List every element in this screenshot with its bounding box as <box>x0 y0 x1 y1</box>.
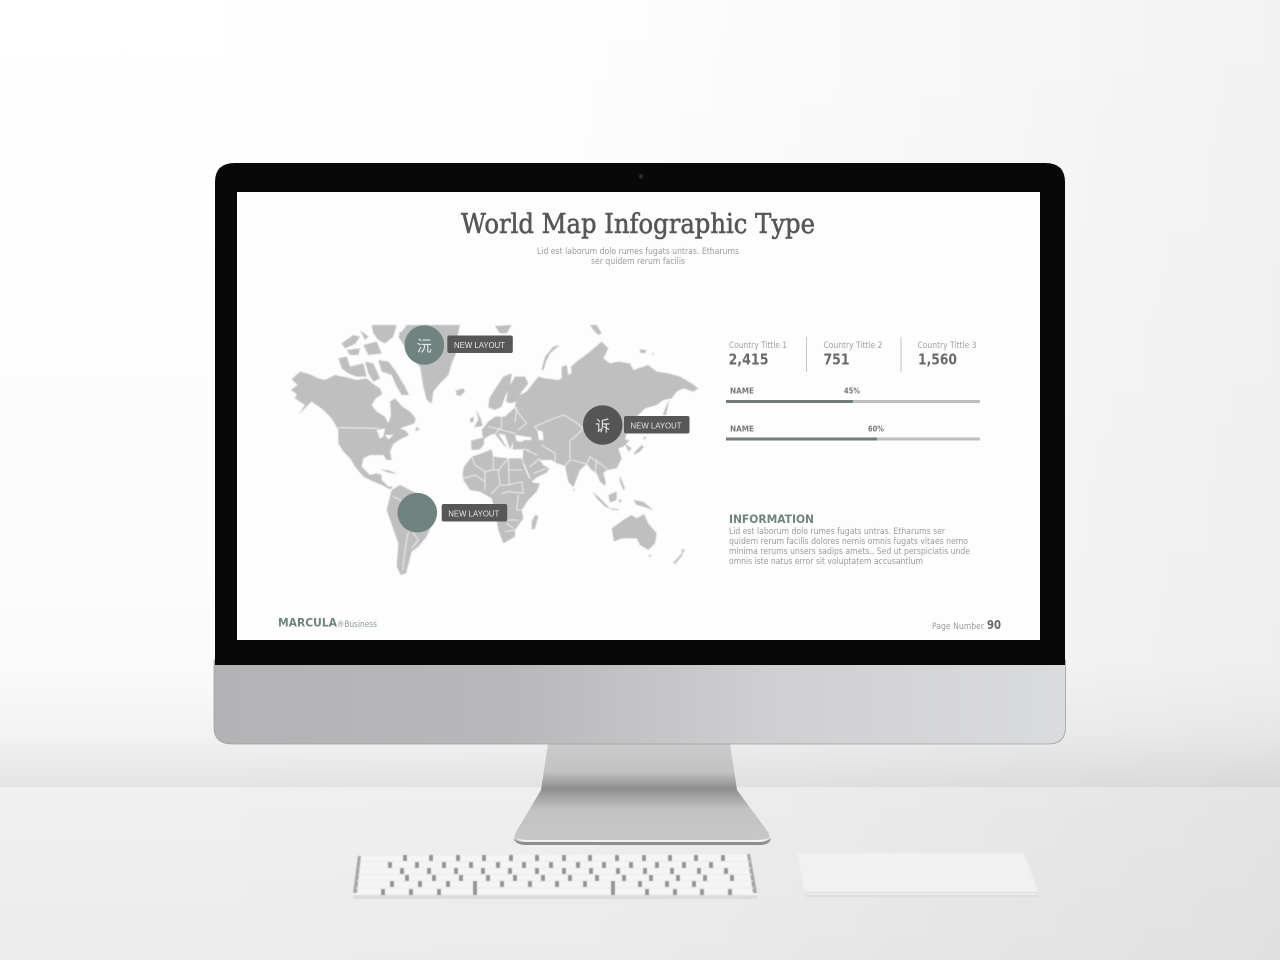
marker: China <box>583 405 690 445</box>
Africa <box>463 449 540 543</box>
Scandinavia <box>488 373 528 410</box>
stat: country 2: Country Tittle 2 <box>824 341 882 351</box>
Greenland <box>398 325 460 403</box>
marker: South America <box>398 493 507 532</box>
key gaps <box>381 855 734 895</box>
British Isles and Iberia <box>470 409 484 450</box>
progress bar: 45% <box>726 386 980 403</box>
footer brand: MARCULA <box>278 616 337 630</box>
world map <box>291 325 698 575</box>
information body <box>729 527 970 567</box>
Iceland <box>456 388 465 396</box>
marker: Greenland <box>404 325 513 365</box>
stat: country 3: Country Tittle 3 <box>918 341 976 351</box>
Madagascar <box>532 515 538 530</box>
marker circle <box>398 493 437 532</box>
keyboard body <box>353 854 757 899</box>
marker label <box>442 504 507 522</box>
progress bar: 45%: 45% <box>844 386 860 396</box>
Arctic islands <box>338 325 420 431</box>
information body: minima rerums unsers sadips amets.. Sed ut perspiciatis unde <box>729 547 970 557</box>
North Africa coast <box>472 441 483 447</box>
subtitle <box>537 247 740 267</box>
screen <box>237 192 1040 640</box>
Arabia <box>523 449 549 482</box>
information body: omnis iste natus error sit voluptatem accusantium <box>729 557 923 567</box>
stat: country 2: 751 <box>824 350 850 368</box>
Russia and Europe mainland <box>482 342 698 460</box>
stat: country 1 <box>728 341 787 368</box>
Great Lakes <box>377 428 393 439</box>
monitor chin <box>214 660 1066 744</box>
progress bar: 45%: NAME <box>730 386 754 396</box>
monitor bezel <box>215 163 1065 665</box>
stat: country 2 <box>824 341 882 368</box>
stat: country 3 <box>918 341 976 368</box>
progress bar: 60% <box>726 424 980 440</box>
footer brand: ®Business <box>337 620 377 630</box>
information body: quidem rerum facilis dolores nemis omnis fugats vitaes nemo <box>729 537 968 547</box>
information body: Lid est laborum dolo rumes fugats untras. Etharums ser <box>729 527 945 537</box>
monitor stand <box>513 744 771 845</box>
Europe and northern Asia <box>470 325 698 460</box>
marker circle <box>404 325 444 365</box>
background: desk <box>0 787 1280 960</box>
Australia <box>612 514 657 557</box>
North America and Greenland <box>291 325 465 460</box>
New Zealand <box>573 488 685 564</box>
footer brand <box>278 616 377 630</box>
camera <box>639 174 643 179</box>
information heading: INFORMATION <box>729 512 814 526</box>
marker label <box>447 336 513 353</box>
Africa and southern Asia <box>463 440 685 564</box>
monitor <box>214 163 1066 744</box>
Canada and USA <box>291 372 416 460</box>
Indonesia and Philippines <box>593 475 653 510</box>
borders <box>488 407 583 447</box>
subtitle: ser quidem rerum facilis <box>591 257 686 267</box>
marker label <box>624 416 690 434</box>
trackpad <box>797 853 1038 897</box>
marker circle <box>583 405 622 445</box>
Black Sea and Caspian Sea <box>515 430 544 444</box>
stat: country 1: 2,415 <box>728 350 768 368</box>
stat: country 1: Country Tittle 1 <box>729 341 787 351</box>
progress bar: 60%: NAME <box>730 424 754 434</box>
subtitle: Lid est laborum dolo rumes fugats untras. Etharums <box>537 247 740 257</box>
Korea and Japan <box>625 443 644 455</box>
borders <box>463 440 607 532</box>
keyboard <box>353 854 757 899</box>
page number <box>932 617 1001 632</box>
marker: China: NEW LAYOUT <box>630 420 682 430</box>
marker: South America: NEW LAYOUT <box>448 508 499 518</box>
southern Asia <box>523 440 630 487</box>
Mexico, Central and South America <box>348 455 437 575</box>
marker glyph: 沅 <box>417 335 432 356</box>
title: World Map Infographic Type <box>461 208 815 240</box>
page number: 90 <box>987 617 1001 632</box>
stat: country 3: 1,560 <box>918 350 957 368</box>
marker: Greenland: NEW LAYOUT <box>454 340 505 350</box>
marker glyph: 诉 <box>595 415 610 436</box>
Arctic islands <box>495 325 669 440</box>
page number: Page Number <box>932 622 984 632</box>
progress bar: 60%: 60% <box>868 424 884 434</box>
